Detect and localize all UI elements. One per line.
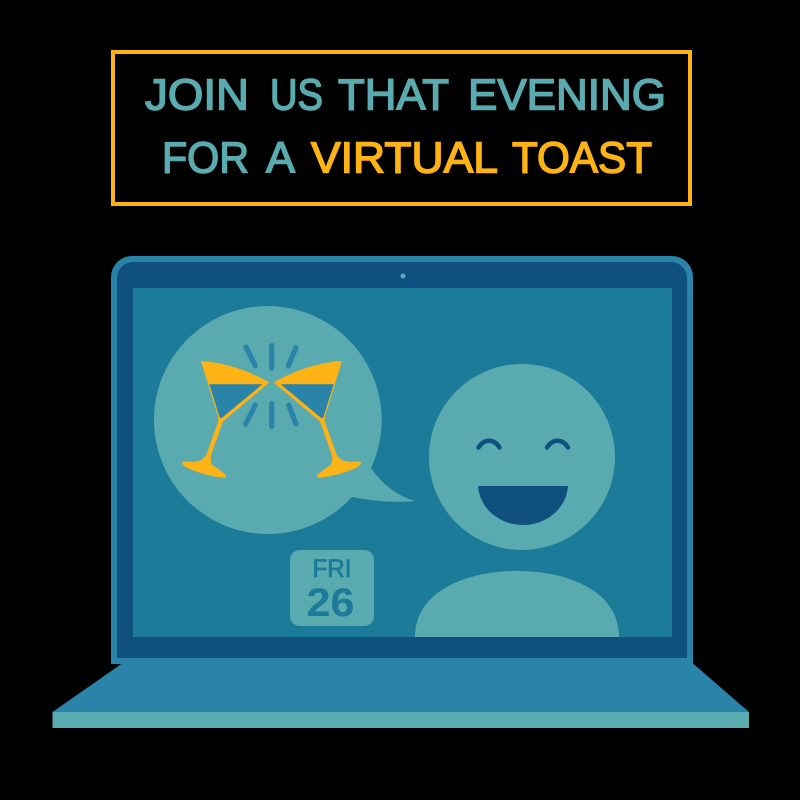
speech bubble <box>154 306 415 534</box>
webcam <box>400 274 406 278</box>
title line 2: VIRTUAL <box>311 134 498 182</box>
right glass <box>274 361 361 478</box>
icon: clinking glasses <box>182 346 361 478</box>
calendar date: 26 <box>306 581 354 625</box>
left eye <box>478 441 500 448</box>
laptop base <box>52 658 749 712</box>
title line 1: US <box>270 72 323 120</box>
title panel <box>113 52 690 204</box>
base front edge <box>52 712 749 728</box>
title line 2 <box>162 134 652 182</box>
title line 1: EVENING <box>468 72 666 120</box>
calendar day: FRI <box>312 555 352 583</box>
lid bezel <box>117 262 687 658</box>
person head <box>429 364 615 550</box>
laptop lid <box>111 256 693 664</box>
person <box>415 364 619 637</box>
laptop <box>52 256 749 728</box>
title line 1: JOIN <box>145 72 249 120</box>
calendar background <box>290 550 374 626</box>
clink sparkle lines <box>246 346 296 426</box>
title frame <box>113 52 690 204</box>
title line 1 <box>145 72 666 120</box>
right eye <box>547 441 568 448</box>
title line 2: TOAST <box>512 134 652 182</box>
title line 2: A <box>266 134 295 182</box>
calendar badge <box>290 550 374 626</box>
person body <box>415 571 619 637</box>
title line 2: FOR <box>162 134 249 182</box>
screen <box>133 288 672 637</box>
left glass <box>182 361 269 478</box>
smiling mouth <box>478 486 568 525</box>
title line 1: THAT <box>338 72 449 120</box>
